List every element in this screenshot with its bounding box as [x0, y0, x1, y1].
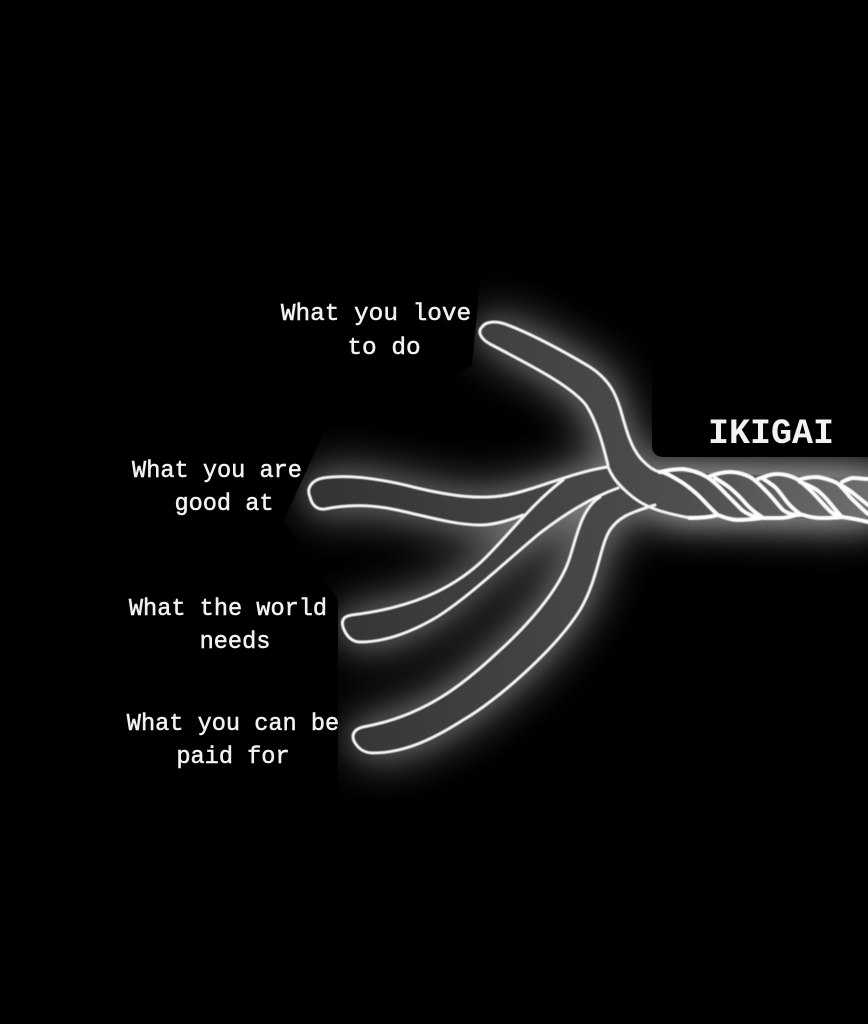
label: what the world needs: What the world: [129, 596, 327, 623]
strand: what you can be paid for: [353, 488, 655, 753]
neon outlines of the four strands: [309, 322, 690, 753]
label: what you can be paid for: What you can be: [127, 711, 339, 738]
label: what you can be paid for: [127, 711, 339, 771]
twisted rope lines: [660, 469, 868, 522]
strand: what you love to do: [480, 322, 868, 522]
label: what the world needs: [129, 596, 327, 656]
black panel behind labels: [0, 0, 481, 1024]
black panel behind title: [652, 350, 868, 457]
glow around rope: [309, 322, 868, 753]
label: what you can be paid for: paid for: [176, 744, 290, 771]
label: what you are good at: good at: [174, 491, 274, 518]
label: what you love to do: to do: [347, 335, 421, 362]
label: what you love to do: [281, 301, 471, 362]
label: what you love to do: What you love: [281, 301, 471, 328]
strand: what you are good at: [309, 467, 612, 525]
title: IKIGAI: [708, 414, 834, 454]
rope illustration: [309, 322, 868, 753]
strand: what the world needs: [342, 466, 618, 642]
label: what the world needs: needs: [200, 629, 270, 656]
label: what you are good at: [132, 458, 302, 518]
label: what you are good at: What you are: [132, 458, 302, 485]
